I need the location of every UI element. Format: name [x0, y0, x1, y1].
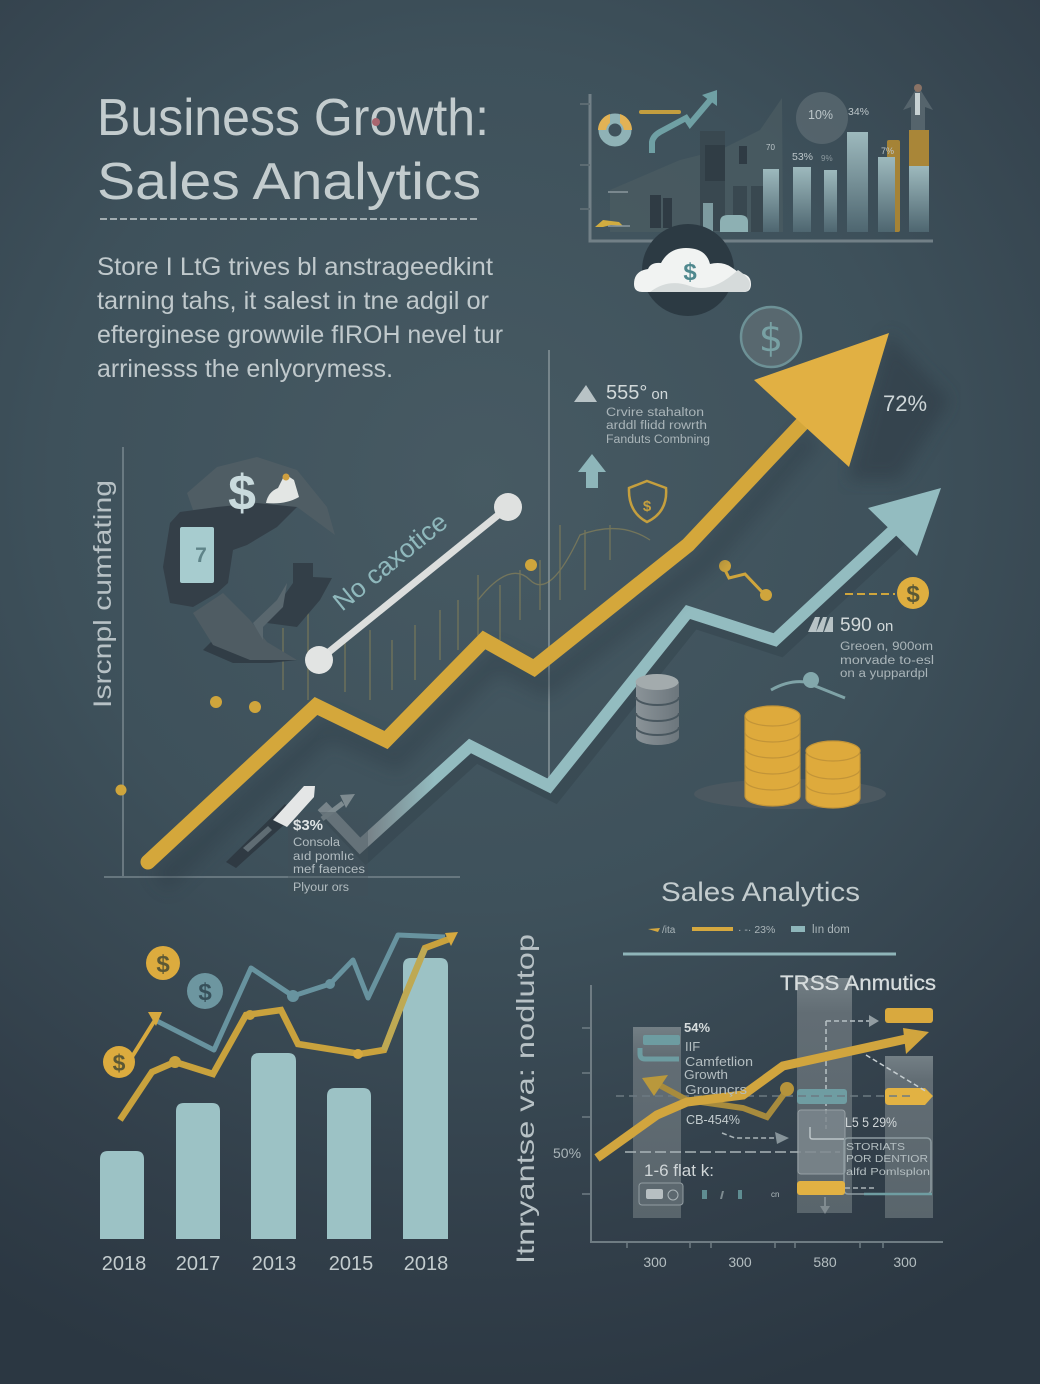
gold growth arrow: [148, 333, 950, 882]
bottom right analytics chart: Grounçrs: [685, 1082, 748, 1097]
callout: dollar 590: [808, 577, 934, 680]
shield icon: [629, 481, 666, 522]
chart legend: [648, 924, 850, 936]
bottom right analytics chart: IIF: [685, 1039, 700, 1054]
intro text block: tarning tahs, it salest in tne adgil or: [97, 287, 489, 315]
bottom right analytics chart: POR DENTIOR: [846, 1154, 928, 1165]
title: [97, 89, 489, 211]
shield icon: $: [643, 498, 652, 515]
bars: [763, 169, 779, 232]
callout: dollar 590: 590 on: [840, 615, 893, 636]
bottom left bar chart: $: [198, 979, 212, 1006]
database cylinder icon: [636, 674, 679, 745]
columns: [633, 1027, 681, 1218]
72% label: 72%: [883, 391, 927, 416]
column details: [643, 1035, 680, 1045]
x axis labels: 580: [813, 1254, 837, 1270]
number card: [180, 527, 214, 583]
bottom right analytics chart: alfd Pomlsplon: [846, 1167, 930, 1178]
callout: dollar 590: Greoen, 900om: [840, 641, 933, 653]
chart labels: 9%: [821, 154, 833, 163]
icon: dollar globe: [741, 307, 801, 367]
year labels: 2018: [404, 1253, 448, 1275]
teal growth arrow: [322, 488, 941, 856]
bottom left bar chart: $: [156, 951, 170, 978]
dashed arrows: [866, 1055, 927, 1092]
intro text block: Store I LtG trives bl anstrageedkint: [97, 253, 493, 281]
bottom right analytics chart: cn: [771, 1190, 779, 1199]
bottom right analytics chart: 1-6 flat k:: [644, 1161, 714, 1180]
icon: dollar globe: $: [759, 316, 783, 360]
callout: small percent: [288, 812, 368, 896]
bottom right analytics chart: Growth: [684, 1067, 728, 1082]
icon: dollar coins: [146, 946, 180, 980]
left axis: [104, 447, 460, 877]
left coin stack: [745, 706, 800, 806]
info boxes: [798, 1110, 845, 1174]
callout: small percent: Consola: [293, 837, 341, 849]
callout: dollar 590: morvade to-esl: [840, 655, 934, 667]
bottom right analytics chart: STORIATS: [846, 1142, 905, 1153]
vertical divider axis: [548, 350, 550, 790]
top right mini bar chart: [580, 84, 933, 241]
callout: dollar 590: $: [906, 581, 920, 608]
x axis labels: [643, 1254, 917, 1270]
bottom left bar chart: $: [113, 1050, 126, 1076]
mini mountain: [266, 474, 299, 503]
gold mini squiggle: [719, 560, 772, 601]
teal line: [155, 935, 445, 1050]
coin stacks: [694, 672, 886, 809]
icon: dark gear with dollar: 7: [195, 544, 207, 567]
title: Sales Analytics: [97, 153, 481, 211]
axes: [591, 985, 943, 1242]
donut icon: [604, 118, 626, 142]
x axis labels: 300: [893, 1254, 917, 1270]
gold line: [120, 938, 452, 1120]
chart legend: lın dom: [812, 924, 850, 936]
10% bubble: [796, 92, 848, 144]
title divider: [100, 218, 478, 220]
white pin line with label: [305, 493, 522, 674]
callout: dollar 590: on a yuppardpl: [840, 668, 928, 680]
year labels: [102, 1253, 448, 1275]
chart legend: /ita: [662, 925, 676, 936]
gold data dots: [116, 559, 537, 796]
background thin bar ticks: [283, 525, 650, 700]
vertical left label: Isrcnpl cumfating: [89, 480, 117, 708]
callout: 555: arddl flidd rowrth: [606, 420, 707, 432]
title: Business Growth:: [97, 89, 489, 147]
up arrow icon: [578, 454, 606, 488]
intro text block: efterginese growwile fIROH nevel tur: [97, 321, 503, 349]
chart labels: 34%: [848, 106, 869, 118]
bottom right analytics chart: Camfetlion: [685, 1054, 753, 1069]
chart legend: · -· 23%: [738, 924, 775, 936]
bottom right analytics chart: 50%: [553, 1145, 581, 1161]
chart labels: 7%: [881, 146, 894, 156]
callout: 555: [574, 382, 710, 446]
white pin line with label: No caxotice: [327, 507, 453, 617]
chart labels: 10%: [808, 108, 833, 122]
year labels: 2013: [252, 1253, 296, 1275]
right coin stack: [806, 741, 860, 808]
chart labels: 53%: [792, 151, 813, 163]
chart axes: [590, 94, 933, 241]
year labels: 2017: [176, 1253, 220, 1275]
intro text block: [97, 253, 503, 383]
x axis labels: 300: [643, 1254, 667, 1270]
callout: small percent: aıd pomlıc: [293, 851, 354, 863]
teal arrow: [652, 98, 712, 153]
year labels: 2015: [329, 1253, 373, 1275]
callout: 555: Crvire stahalton: [606, 407, 704, 419]
bottom right analytics chart: [553, 972, 943, 1270]
pen icon: [226, 786, 315, 868]
bars: [100, 958, 448, 1239]
chart labels: 70: [766, 143, 775, 152]
callout: 555: Fanduts Combning: [606, 434, 710, 446]
x axis labels: 300: [728, 1254, 752, 1270]
background building shapes: [610, 98, 783, 232]
year labels: 2018: [102, 1253, 146, 1275]
bottom right analytics chart: CB-454%: [686, 1113, 740, 1127]
bottom right analytics chart: L5 5 29%: [845, 1114, 897, 1130]
bottom left bar chart: [100, 932, 458, 1275]
callout: small percent: $3%: [293, 817, 323, 834]
intro text block: arrinesss the enlyorymess.: [97, 355, 393, 383]
vertical right label: Itnryantse va: nodlutop: [512, 934, 540, 1264]
icon: cloud with dollar: $: [683, 259, 697, 286]
figure on arrow: [903, 86, 933, 130]
chart labels: TRSS Anmutics: [780, 972, 936, 995]
callout: small percent: Plyour ors: [293, 882, 349, 894]
callout: small percent: mef faences: [293, 864, 365, 876]
icon: dark gear with dollar: [163, 457, 335, 663]
chart labels: [766, 106, 894, 163]
gold arrows: [650, 1080, 787, 1117]
dollar sign: $: [228, 465, 256, 521]
bottom right analytics chart: 54%: [684, 1020, 710, 1035]
icon: cloud with dollar: [634, 224, 751, 316]
bottom right heading: Sales Analytics: [661, 877, 860, 907]
callout: 555: 555° on: [606, 382, 668, 404]
